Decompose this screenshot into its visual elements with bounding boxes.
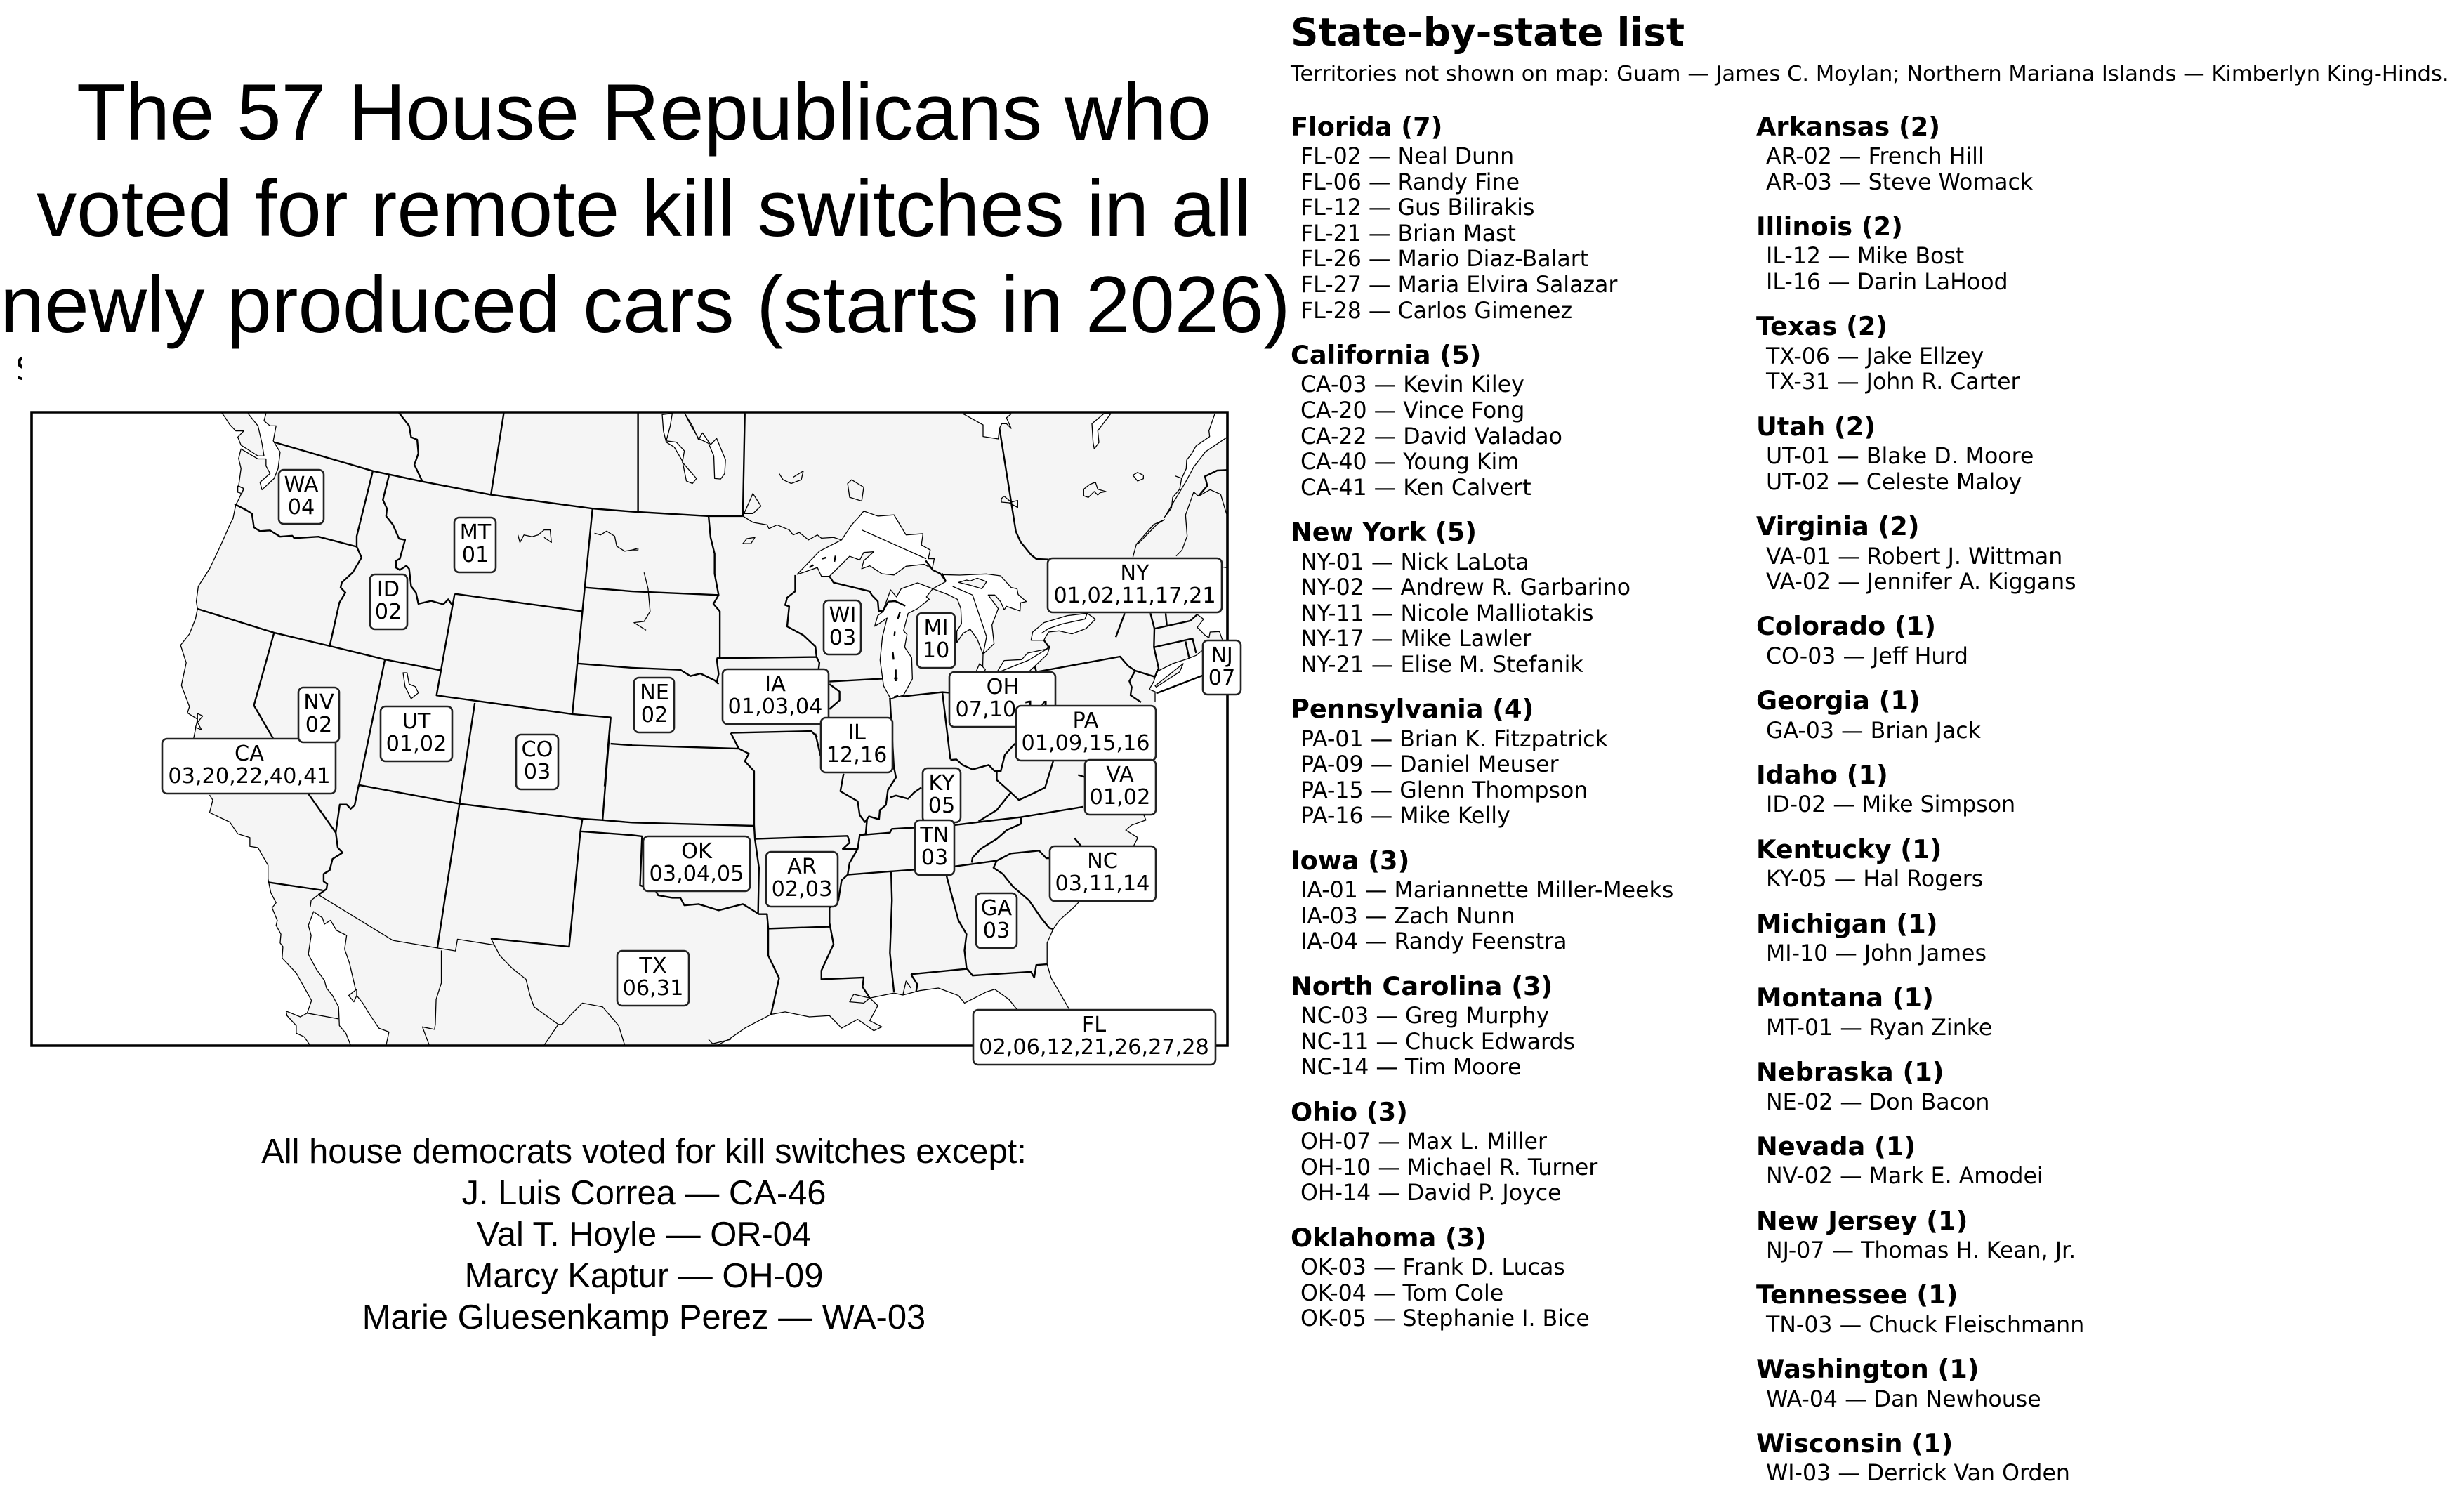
state label: New York: 01,02,11,17,21 [1053, 584, 1216, 608]
Ohio list: OH-07 — Max L. Miller [1300, 1129, 1547, 1154]
North Carolina list: NC-03 — Greg Murphy [1300, 1004, 1549, 1029]
state label: Oklahoma [643, 836, 750, 891]
Florida list: FL-12 — Gus Bilirakis [1300, 195, 1534, 221]
Texas list: TX-31 — John R. Carter [1766, 369, 2020, 395]
state label: Pennsylvania [1016, 706, 1156, 761]
California list: CA-20 — Vince Fong [1300, 398, 1524, 423]
state label: Michigan: 10 [923, 638, 949, 663]
Nevada list [1756, 1131, 2043, 1189]
state label: Washington [279, 470, 324, 524]
state label: Michigan [917, 613, 955, 668]
Kentucky list: KY-05 — Hal Rogers [1766, 867, 1983, 892]
Utah list: UT-01 — Blake D. Moore [1766, 444, 2034, 469]
state label: Arkansas [766, 852, 838, 907]
state label: Nebraska: 02 [641, 703, 668, 728]
state label: Texas: TX [638, 954, 667, 978]
state label: Idaho [370, 574, 407, 629]
Michigan list: MI-10 — John James [1766, 941, 1987, 966]
list column 2 [1756, 111, 2084, 1486]
New Jersey list [1756, 1206, 2076, 1263]
Iowa list: IA-01 — Mariannette Miller-Meeks [1300, 878, 1673, 903]
Florida list: FL-21 — Brian Mast [1300, 221, 1516, 246]
Ohio list: OH-14 — David P. Joyce [1300, 1180, 1562, 1206]
text block: democrats who voted against: Marie Gluesenkamp Perez — WA-03 [362, 1298, 925, 1336]
New York list [1291, 517, 1630, 678]
state label: Tennessee [915, 820, 954, 875]
Tennessee list: TN-03 — Chuck Fleischmann [1766, 1312, 2084, 1338]
Idaho list: Idaho (1) [1756, 760, 1888, 790]
text block: democrats who voted against: Val T. Hoyle — OR-04 [477, 1216, 811, 1254]
territories note: Territories not shown on map: Guam — James C. Moylan; Northern Mariana Islands — Kimberlyn King-Hinds. [1291, 62, 2449, 86]
Utah list: UT-02 — Celeste Maloy [1766, 470, 2022, 495]
state label: Texas: 06,31 [623, 976, 683, 1001]
state label: Pennsylvania: 01,09,15,16 [1021, 731, 1150, 756]
title: The 57 House Republicans who [77, 68, 1211, 157]
state label: Utah: 01,02 [386, 732, 447, 756]
Ohio list [1291, 1097, 1598, 1206]
text block: democrats who voted against [261, 1133, 1027, 1336]
New York list: New York (5) [1291, 517, 1477, 547]
Wisconsin list [1756, 1428, 2070, 1486]
state label: Georgia: GA [981, 896, 1012, 921]
North Carolina list: NC-14 — Tim Moore [1300, 1055, 1522, 1080]
state label: Washington: WA [284, 473, 319, 497]
Nevada list: NV-02 — Mark E. Amodei [1766, 1164, 2043, 1189]
Florida list [1291, 111, 1618, 324]
Washington list [1756, 1354, 2041, 1412]
Iowa list: Iowa (3) [1291, 846, 1409, 876]
New York list: NY-17 — Mike Lawler [1300, 626, 1531, 652]
Washington list: Washington (1) [1756, 1354, 1979, 1384]
Pennsylvania list: Pennsylvania (4) [1291, 694, 1534, 724]
California list: California (5) [1291, 340, 1481, 370]
Georgia list: Georgia (1) [1756, 685, 1921, 716]
Idaho list [1756, 760, 2015, 817]
map geography: north-east quadrant [632, 413, 950, 770]
state label: Florida: FL [1082, 1013, 1106, 1037]
map geography: north-west quadrant [32, 413, 632, 787]
state label: Kentucky [923, 768, 961, 822]
state label: Idaho: ID [377, 577, 400, 602]
map land background [32, 412, 1227, 1046]
state label: Wisconsin: 03 [829, 626, 856, 650]
Virginia list: VA-02 — Jennifer A. Kiggans [1766, 570, 2076, 595]
list heading: State-by-state list [1291, 10, 1685, 55]
Virginia list: VA-01 — Robert J. Wittman [1766, 544, 2062, 569]
Nebraska list: NE-02 — Don Bacon [1766, 1090, 1989, 1115]
state label: Nevada: 02 [305, 713, 332, 737]
Oklahoma list: OK-04 — Tom Cole [1300, 1281, 1503, 1306]
Virginia list: Virginia (2) [1756, 511, 1920, 541]
Iowa list [1291, 846, 1673, 954]
state label: Oklahoma: OK [681, 839, 713, 864]
Nebraska list: Nebraska (1) [1756, 1057, 1944, 1087]
state label: Illinois [821, 718, 892, 772]
Wisconsin list: Wisconsin (1) [1756, 1428, 1953, 1459]
state label: Illinois: IL [848, 721, 866, 745]
list column 1 [1291, 111, 1673, 1331]
Nevada list: Nevada (1) [1756, 1131, 1916, 1162]
Iowa list: IA-04 — Randy Feenstra [1300, 929, 1567, 954]
title [0, 68, 1291, 350]
state label: Nebraska [634, 678, 674, 732]
Oklahoma list: OK-05 — Stephanie I. Bice [1300, 1306, 1590, 1331]
state label: Virginia: VA [1106, 763, 1134, 787]
state label: California: 03,20,22,40,41 [168, 764, 331, 789]
Washington list: WA-04 — Dan Newhouse [1766, 1387, 2041, 1412]
state label: Idaho: 02 [375, 600, 402, 624]
Arkansas list: AR-02 — French Hill [1766, 144, 1984, 169]
state label: Georgia [976, 893, 1017, 948]
state label: Nebraska: NE [640, 680, 669, 705]
state label: Michigan: MI [923, 616, 949, 640]
North Carolina list: North Carolina (3) [1291, 971, 1553, 1001]
Pennsylvania list: PA-16 — Mike Kelly [1300, 803, 1510, 829]
Iowa list: IA-03 — Zach Nunn [1300, 904, 1515, 929]
Arkansas list: Arkansas (2) [1756, 111, 1940, 142]
state label: Ohio: 07,10,14 [956, 697, 1050, 722]
map geography: north-east coast and lower lakes [963, 414, 1227, 702]
California list [1291, 340, 1562, 501]
state label: Florida [973, 1010, 1215, 1065]
state label: Iowa [723, 669, 829, 724]
North Carolina list: NC-11 — Chuck Edwards [1300, 1029, 1575, 1055]
Utah list: Utah (2) [1756, 412, 1876, 442]
state label: Arkansas: AR [787, 855, 817, 879]
Idaho list: ID-02 — Mike Simpson [1766, 792, 2015, 817]
Florida list: FL-27 — Maria Elvira Salazar [1300, 272, 1617, 298]
California list: CA-03 — Kevin Kiley [1300, 372, 1524, 397]
Texas list [1756, 311, 2020, 395]
title: voted for remote kill switches in all [37, 164, 1251, 254]
Michigan list: Michigan (1) [1756, 909, 1938, 938]
California list: CA-41 — Ken Calvert [1300, 475, 1531, 501]
state label: New Jersey: NJ [1211, 643, 1233, 668]
state label: Utah: UT [402, 709, 431, 734]
Illinois list [1756, 211, 2008, 295]
Ohio list: Ohio (3) [1291, 1097, 1408, 1127]
Texas list: Texas (2) [1756, 311, 1887, 341]
state label: Iowa: IA [765, 672, 786, 697]
Georgia list: GA-03 — Brian Jack [1766, 718, 1981, 744]
state label: Iowa: 01,03,04 [728, 695, 822, 719]
state label: Texas [617, 951, 689, 1006]
Pennsylvania list: PA-15 — Glenn Thompson [1300, 778, 1588, 803]
Michigan list [1756, 909, 1987, 966]
Pennsylvania list: PA-01 — Brian K. Fitzpatrick [1300, 727, 1608, 752]
Florida list: FL-28 — Carlos Gimenez [1300, 298, 1572, 324]
Illinois list: IL-12 — Mike Bost [1766, 244, 1964, 269]
state label: Ohio [949, 672, 1055, 727]
state label: Washington: 04 [288, 495, 315, 520]
Wisconsin list: WI-03 — Derrick Van Orden [1766, 1461, 2070, 1486]
state label: Nevada: NV [303, 690, 334, 715]
map geography: upper Great Lakes [875, 560, 1027, 699]
California list: CA-22 — David Valadao [1300, 424, 1562, 449]
state label: Montana [454, 518, 496, 572]
state label: North Carolina: NC [1087, 849, 1118, 874]
Utah list [1756, 412, 2034, 495]
Florida list: FL-06 — Randy Fine [1300, 170, 1520, 195]
Ohio list: OH-10 — Michael R. Turner [1300, 1155, 1597, 1180]
Arkansas list [1756, 111, 2033, 195]
state label: Nevada [298, 688, 339, 742]
Montana list: Montana (1) [1756, 982, 1934, 1013]
state label: Arkansas: 02,03 [772, 877, 832, 902]
state label: New Jersey [1203, 640, 1241, 695]
state label: Wisconsin [824, 600, 861, 654]
Florida list: Florida (7) [1291, 111, 1442, 142]
text block: democrats who voted against: J. Luis Correa — CA-46 [462, 1174, 826, 1212]
New York list: NY-21 — Elise M. Stefanik [1300, 652, 1583, 678]
Oklahoma list [1291, 1223, 1590, 1331]
Tennessee list: Tennessee (1) [1756, 1279, 1958, 1310]
North Carolina list [1291, 971, 1575, 1080]
Pennsylvania list: PA-09 — Daniel Meuser [1300, 752, 1559, 777]
state label: Kentucky: 05 [928, 794, 955, 818]
state label: Colorado [516, 735, 558, 789]
state label: New York: NY [1120, 561, 1149, 586]
Kentucky list [1756, 834, 1983, 892]
Colorado list: Colorado (1) [1756, 611, 1936, 641]
state label: Montana: MT [460, 520, 492, 545]
Illinois list: IL-16 — Darin LaHood [1766, 270, 2008, 295]
New Jersey list: NJ-07 — Thomas H. Kean, Jr. [1766, 1238, 2076, 1263]
Colorado list [1756, 611, 1968, 669]
map geography: south-west quadrant [32, 703, 632, 1046]
New York list: NY-11 — Nicole Malliotakis [1300, 601, 1593, 626]
state label: Colorado: 03 [524, 760, 551, 784]
state label: New York [1048, 558, 1222, 612]
state label: Virginia: 01,02 [1090, 785, 1150, 810]
state label: North Carolina [1050, 846, 1156, 901]
California list: CA-40 — Young Kim [1300, 449, 1519, 475]
Texas list: TX-06 — Jake Ellzey [1766, 344, 1984, 369]
state label: Colorado: CO [521, 737, 553, 762]
state label: North Carolina: 03,11,14 [1055, 871, 1149, 896]
text block: democrats who voted against: Marcy Kaptur — OH-09 [465, 1257, 823, 1295]
Montana list: MT-01 — Ryan Zinke [1766, 1015, 1992, 1041]
state label: New Jersey: 07 [1208, 666, 1235, 690]
Nebraska list [1756, 1057, 1989, 1115]
Tennessee list [1756, 1279, 2084, 1338]
state label: Utah [381, 706, 452, 761]
Colorado list: CO-03 — Jeff Hurd [1766, 644, 1968, 669]
map geography: south-east quadrant [632, 702, 1227, 1046]
state label: Wisconsin: WI [829, 603, 856, 628]
Oklahoma list: OK-03 — Frank D. Lucas [1300, 1255, 1565, 1280]
state label: California [162, 739, 336, 794]
state label: Florida: 02,06,12,21,26,27,28 [979, 1035, 1209, 1060]
Georgia list [1756, 685, 1981, 744]
state label: Pennsylvania: PA [1072, 709, 1099, 733]
Illinois list: Illinois (2) [1756, 211, 1903, 242]
Montana list [1756, 982, 1992, 1041]
text block: democrats who voted against: All house democrats voted for kill switches except: [261, 1133, 1027, 1171]
state label: Georgia: 03 [983, 919, 1010, 943]
title: newly produced cars (starts in 2026) [0, 261, 1291, 350]
state label: Ohio: OH [987, 675, 1019, 699]
state label: Kentucky: KY [928, 771, 955, 796]
Pennsylvania list [1291, 694, 1608, 829]
New York list: NY-01 — Nick LaLota [1300, 549, 1529, 574]
Oklahoma list: Oklahoma (3) [1291, 1223, 1487, 1253]
state label: California: CA [235, 742, 264, 766]
New York list: NY-02 — Andrew R. Garbarino [1300, 575, 1630, 600]
Virginia list [1756, 511, 2076, 595]
state label: Virginia [1085, 760, 1156, 815]
New Jersey list: New Jersey (1) [1756, 1206, 1968, 1236]
state label: Montana: 01 [462, 543, 489, 567]
state label: Tennessee: 03 [921, 846, 948, 870]
Kentucky list: Kentucky (1) [1756, 834, 1942, 864]
state label: Tennessee: TN [919, 823, 949, 848]
Florida list: FL-26 — Mario Diaz-Balart [1300, 246, 1588, 272]
Arkansas list: AR-03 — Steve Womack [1766, 170, 2033, 195]
map frame [32, 412, 1227, 1046]
Florida list: FL-02 — Neal Dunn [1300, 144, 1514, 169]
state label: Oklahoma: 03,04,05 [650, 862, 744, 886]
state label: Illinois: 12,16 [826, 743, 887, 768]
